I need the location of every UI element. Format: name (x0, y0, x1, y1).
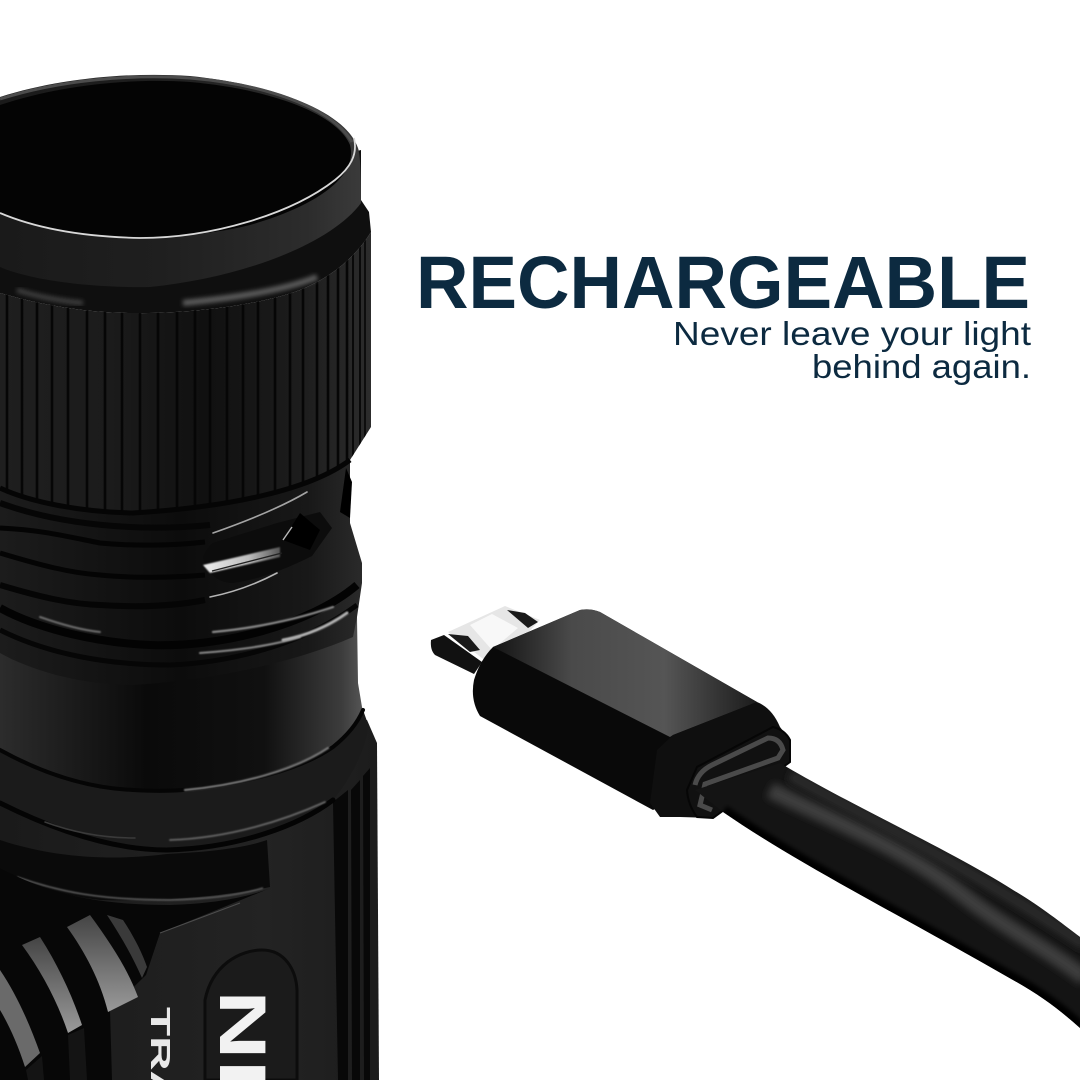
logo recess (205, 950, 297, 1080)
cable (695, 763, 1080, 1028)
chamfer edge (160, 903, 240, 933)
collar inner seal (687, 727, 790, 818)
shadow between wedge and dial (0, 868, 268, 1080)
knurled ring (0, 232, 371, 513)
connector top face (493, 609, 757, 737)
subtitle: Never leave your light (673, 315, 1031, 352)
usb cable (431, 606, 1080, 1028)
neck grooves (0, 503, 357, 665)
bezel outer band (0, 75, 361, 287)
tube highlight lines (0, 710, 363, 850)
neck section (0, 440, 362, 685)
subtitle: behind again. (812, 348, 1031, 385)
collar (650, 702, 790, 818)
body side ridges (333, 768, 370, 1080)
tube collar band (0, 710, 368, 850)
metal plug (431, 606, 540, 674)
black wedge under tube (0, 840, 270, 900)
seal texture (695, 738, 783, 810)
lower tube section (0, 617, 367, 813)
wedge highlight (17, 877, 263, 900)
knurl bottom shadow (0, 460, 350, 513)
flashlight lower body (0, 720, 379, 1080)
flashlight (0, 75, 379, 1080)
dial ribs (0, 915, 147, 1080)
top shoulder (0, 150, 371, 313)
switch slot (203, 468, 352, 583)
bezel opening (0, 81, 351, 237)
title: RECHARGEABLE (416, 241, 1030, 324)
bezel lit edge (0, 138, 355, 238)
cable shading (723, 775, 1080, 1028)
logo text: NE (206, 990, 280, 1080)
connector housing (473, 609, 757, 810)
secondary logo text: TRA (145, 1007, 176, 1080)
neck highlights (40, 492, 347, 653)
shoulder highlight (183, 277, 317, 303)
knurl lines (7, 225, 365, 520)
subtitle (673, 315, 1031, 385)
